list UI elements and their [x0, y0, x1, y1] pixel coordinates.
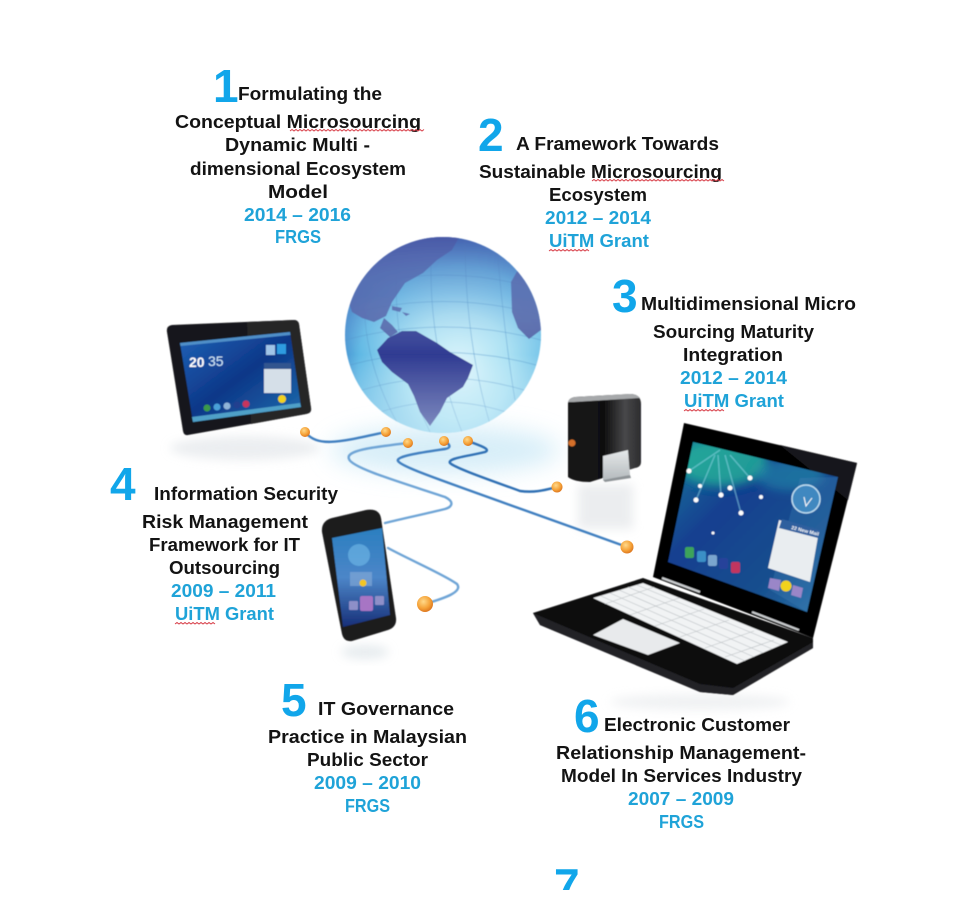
block 1: Conceptual Microsourcing [175, 111, 421, 132]
block 4: Risk Management [142, 511, 308, 532]
block 6 [556, 690, 806, 832]
block 4 [110, 458, 339, 624]
illustration: globe [345, 228, 545, 433]
land: africa [510, 271, 542, 340]
block 2: Ecosystem [549, 184, 647, 205]
illustration: cables [305, 432, 627, 604]
block 4: Framework for IT [149, 534, 301, 555]
tablet clock: 20 [189, 354, 205, 370]
block 5: Public Sector [307, 749, 428, 770]
land: caribbean [380, 306, 410, 337]
globe grid [356, 274, 540, 431]
mail widget [768, 519, 820, 582]
block 3 [612, 270, 856, 411]
screen clock [792, 485, 820, 513]
block 2: A Framework Towards [516, 133, 719, 154]
land: south america [377, 331, 473, 426]
block 2: 2012 – 2014 [545, 207, 652, 228]
block 1: dimensional Ecosystem [190, 158, 406, 179]
block 1: FRGS [275, 226, 321, 247]
block 5: FRGS [345, 795, 390, 816]
block 6: Electronic Customer [604, 714, 790, 735]
block 2: Sustainable Microsourcing [479, 161, 722, 182]
screen dots [686, 468, 763, 534]
server power button [568, 440, 576, 446]
number 2: 2 [478, 109, 504, 161]
illustration: laptop [533, 423, 857, 695]
illustration: tablet [167, 320, 311, 435]
block 6: Model In Services Industry [561, 765, 803, 786]
land: north america [350, 236, 458, 322]
block 1: Formulating the [238, 83, 382, 104]
block 5: Practice in Malaysian [268, 726, 467, 747]
laptop lid [653, 423, 857, 638]
block 1 [175, 60, 424, 247]
illustration: cable end balls [300, 427, 634, 612]
tablet screen [180, 332, 301, 422]
block 3: UiTM Grant [684, 390, 784, 411]
block 6: Relationship Management- [556, 742, 806, 763]
number 5: 5 [281, 674, 307, 726]
block 3: 2012 – 2014 [680, 367, 788, 388]
block 4: 2009 – 2011 [171, 580, 276, 601]
block 2 [478, 109, 724, 251]
block 5: IT Governance [318, 698, 454, 719]
weather widget [768, 578, 803, 598]
laptop base [533, 578, 813, 695]
block 4: Information Security [154, 483, 339, 504]
number 6: 6 [574, 690, 600, 742]
hinges [662, 578, 799, 630]
block 3: Integration [683, 344, 783, 365]
block 6: 2007 – 2009 [628, 788, 734, 809]
block 3: Sourcing Maturity [653, 321, 815, 342]
block 1: Model [268, 181, 328, 202]
trackpad [593, 619, 680, 655]
server stand [603, 450, 630, 480]
block 3: Multidimensional Micro [641, 293, 856, 314]
number 4: 4 [110, 458, 136, 510]
number 1: 1 [213, 60, 239, 112]
block 4: UiTM Grant [175, 603, 274, 624]
keyboard [593, 583, 788, 664]
illustration: tablet: 35 [208, 353, 224, 369]
block 2: UiTM Grant [549, 230, 649, 251]
block 6: FRGS [659, 811, 704, 832]
block 1: Dynamic Multi - [225, 134, 370, 155]
block 5 [268, 674, 467, 816]
mail widget: 22 New Mail [791, 525, 820, 538]
block 4: Outsourcing [169, 557, 280, 578]
dock icons [685, 547, 740, 573]
illustration: server [568, 394, 641, 482]
laptop screen [668, 442, 838, 612]
floor reflections [170, 426, 790, 710]
block 5: 2009 – 2010 [314, 772, 421, 793]
phone screen [332, 528, 390, 627]
tablet widgets [204, 344, 291, 412]
illustration: smartphone [322, 510, 396, 641]
block 1: 2014 – 2016 [244, 204, 351, 225]
number 3: 3 [612, 270, 638, 322]
